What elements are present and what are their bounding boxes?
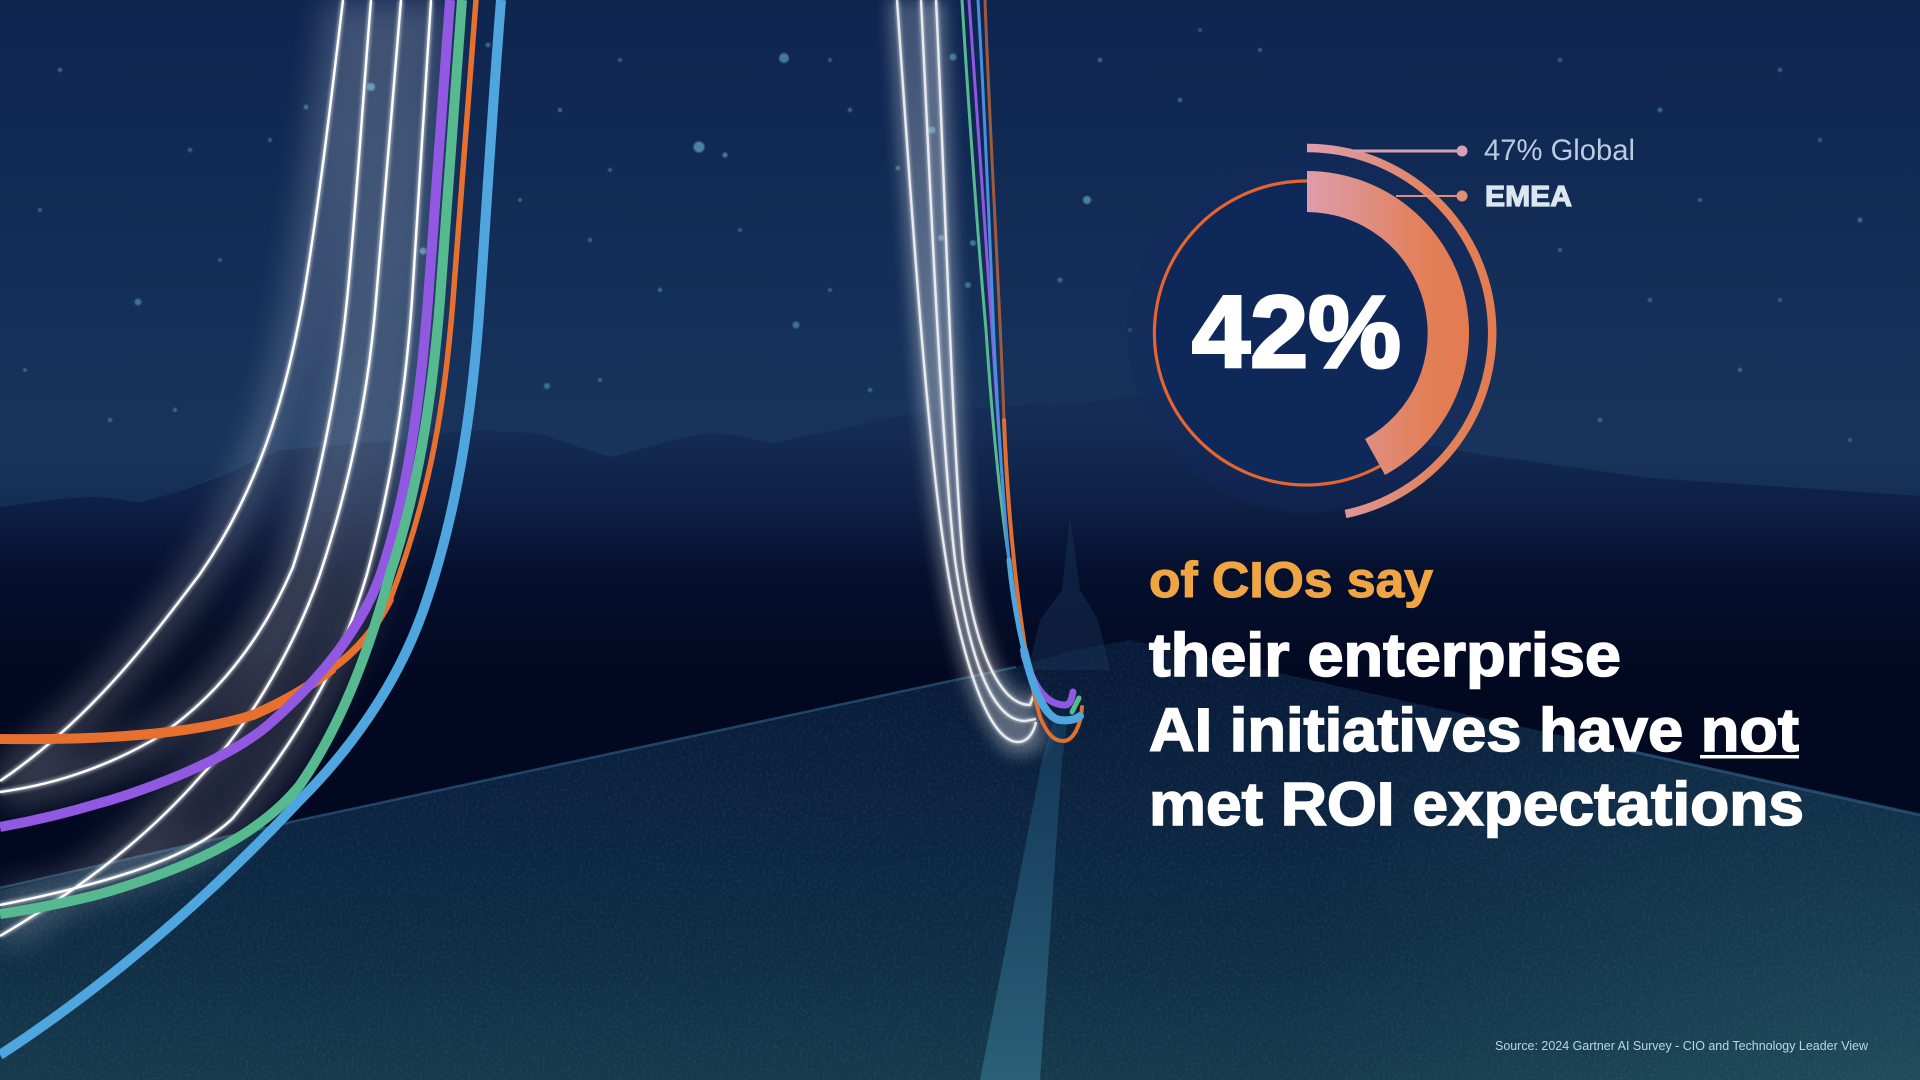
line 2: AI initiatives have not [1149,696,1799,764]
navy disc [1155,181,1459,485]
disc halo [1127,153,1487,513]
background: stars [23,28,1862,622]
legend: EMEA: EMEA [1485,181,1572,213]
line 1: their enterprise [1149,621,1621,689]
source note: Source: 2024 Gartner AI Survey - CIO and Technology Leader View [1495,1038,1869,1053]
road: distant hill shape [1028,515,1110,670]
legend: 47% Global: 47% Global [1484,134,1635,167]
headline: of CIOs say: of CIOs say [1149,552,1433,608]
background: road surface [0,640,1920,1080]
light trails: left blue curve [0,0,501,1055]
road: centre line [980,720,1068,1080]
EMEA 42% arc [1307,171,1469,475]
light trails: distant white lines [897,0,1036,742]
underline under not [1700,755,1799,758]
global 47% arc [1307,148,1492,514]
headline: statement [1149,621,1804,838]
line 3: met ROI expectations [1149,770,1804,838]
stat panel: donut gauge [1127,146,1492,514]
stat: 42%: 42% [1192,275,1401,389]
light trails: left orange curve [0,0,476,739]
EMEA leader line and dot [1396,190,1468,202]
light trails: left purple curve [0,0,450,827]
thin orange ring [1154,181,1380,485]
background: mountain silhouette [0,392,1920,930]
road: left and right edge lines [0,667,1920,888]
global leader line and dot [1353,146,1468,156]
light trails: left green curve [0,0,462,914]
light trails: distant coloured curves [962,0,1082,741]
light trails: left white lines [0,0,431,936]
light trails: distant white glow [897,0,1046,755]
light trails: tight white halo [0,0,1036,936]
light trails: left white glow [0,0,431,936]
